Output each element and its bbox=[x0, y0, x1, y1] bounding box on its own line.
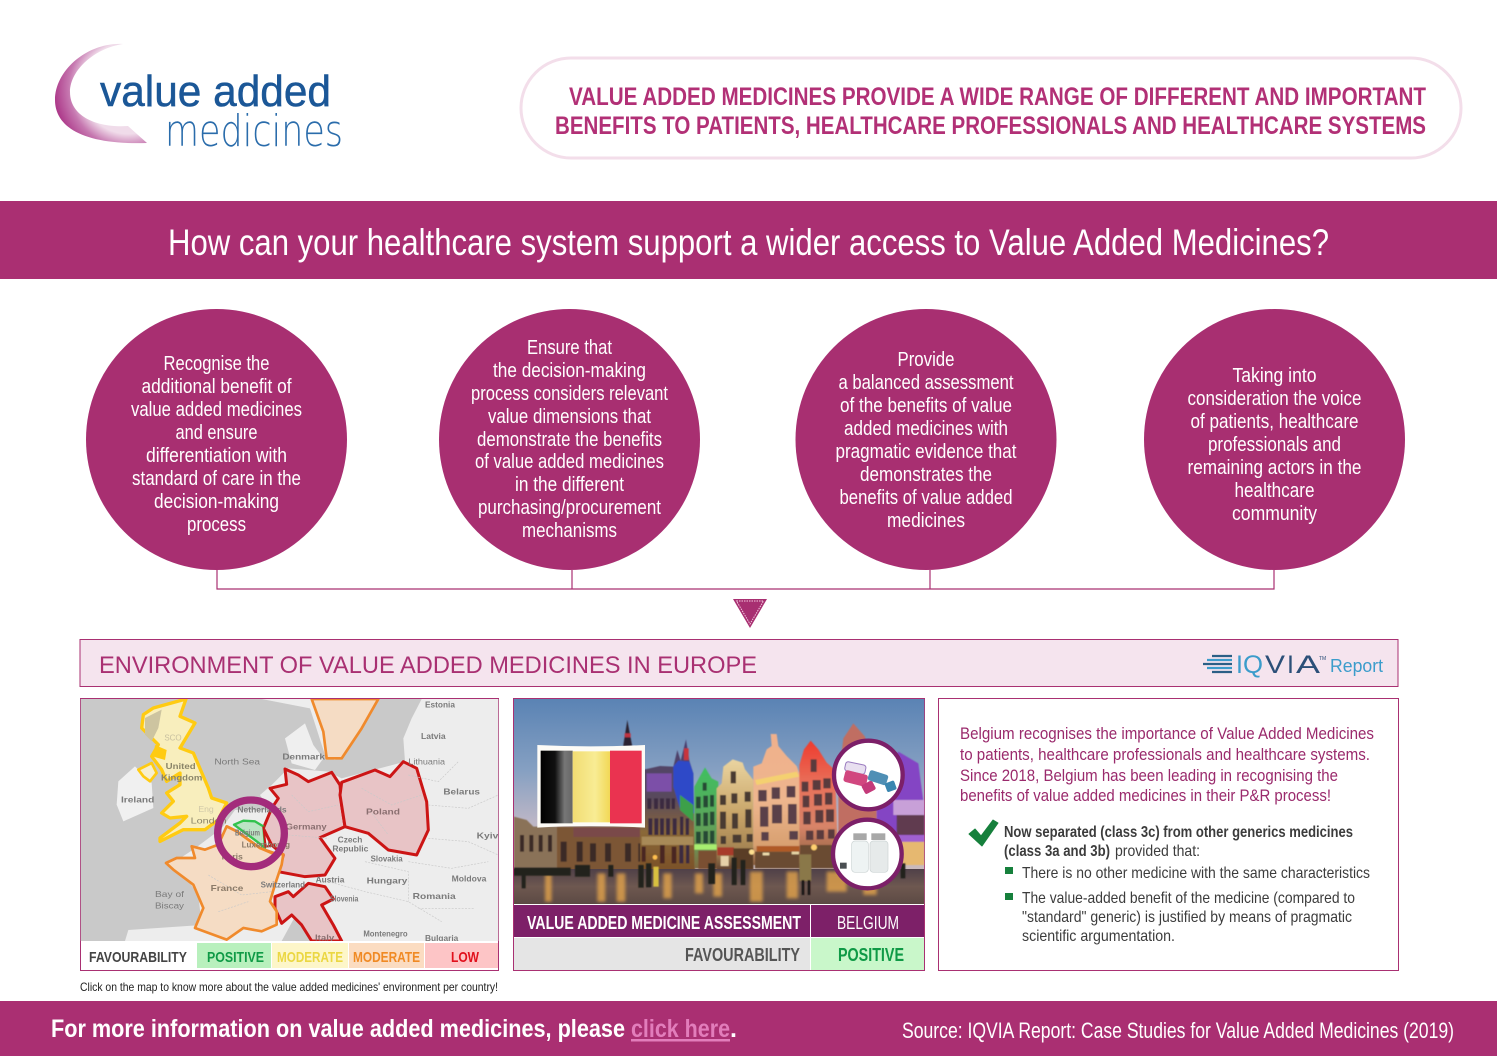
map labels: Slovakia bbox=[371, 853, 403, 863]
footer band bbox=[0, 1001, 1497, 1056]
criteria list: (class 3a and 3b) bbox=[1004, 843, 1110, 860]
map labels: Paris bbox=[222, 851, 243, 861]
circle 2: value dimensions: process considers relevant bbox=[471, 383, 668, 405]
map caption: Click on the map to know more about the value added medicines' environment per country! bbox=[80, 980, 498, 994]
positive: Belgium bbox=[234, 821, 265, 848]
circle 1: recognise benefit: Recognise the bbox=[164, 353, 270, 375]
map labels: Netherlands bbox=[237, 804, 287, 814]
low: Germany bbox=[263, 769, 345, 877]
circle 4: voice of stakeholders: professionals and bbox=[1208, 434, 1341, 456]
map labels: Austria bbox=[316, 874, 345, 884]
legend: favourability bbox=[89, 943, 498, 968]
map labels: Italy bbox=[315, 932, 335, 942]
map labels: Luxembourg bbox=[242, 840, 290, 850]
circle 1: recognise benefit: and ensure bbox=[176, 422, 258, 444]
circle 2: value dimensions: in the different bbox=[515, 474, 624, 496]
circle 3: balanced assessment: added medicines with bbox=[844, 418, 1008, 440]
map labels: Poland bbox=[366, 806, 400, 816]
circle 2: value dimensions: value dimensions that bbox=[488, 406, 651, 428]
IQVIA report logo: V bbox=[1265, 651, 1285, 679]
map of Europe with favourability outlines bbox=[81, 699, 499, 943]
circle 1: recognise benefit: value added medicines bbox=[131, 399, 302, 421]
circle 2: value dimensions: the decision-making bbox=[493, 360, 646, 382]
panel: Belgium text bbox=[938, 698, 1398, 970]
map labels: Bay of bbox=[155, 889, 185, 899]
logo: value added medicines bbox=[55, 44, 343, 157]
map labels: Kyiv bbox=[477, 830, 499, 840]
criteria list: The value-added benefit of the medicine (compared to bbox=[1022, 890, 1355, 907]
IQVIA report logo: A bbox=[1296, 651, 1320, 679]
Scottish highlands bbox=[145, 710, 162, 741]
criteria list: "standard" generic) is justified by means of pragmatic bbox=[1022, 909, 1352, 926]
circle 3: balanced assessment: pragmatic evidence that bbox=[836, 441, 1017, 463]
intro paragraph: Since 2018, Belgium has been leading in recognising the bbox=[960, 766, 1338, 785]
panel: Europe map bbox=[80, 698, 499, 970]
map labels: North Sea bbox=[214, 756, 260, 766]
map labels: Germany bbox=[286, 821, 327, 831]
map labels: Kingdom bbox=[161, 773, 203, 783]
map labels: Czech bbox=[338, 834, 362, 844]
circle 4: voice of stakeholders: remaining actors in the bbox=[1188, 457, 1362, 479]
circle 4: voice of stakeholders: healthcare bbox=[1234, 480, 1314, 502]
IQVIA report logo: I bbox=[1236, 651, 1243, 679]
circle 3: balanced assessment bbox=[796, 309, 1056, 570]
map labels: Moldova bbox=[452, 873, 487, 883]
legend: favourability: MODERATE bbox=[353, 949, 420, 966]
map labels: Romania bbox=[413, 891, 456, 901]
criteria list bbox=[1004, 824, 1370, 945]
circle 3: balanced assessment: of the benefits of value bbox=[840, 395, 1012, 417]
circle 4: voice of stakeholders: community bbox=[1232, 503, 1317, 525]
green house bbox=[694, 767, 718, 868]
circle 3: balanced assessment: benefits of value added bbox=[840, 487, 1012, 509]
section header: environment in Europe: ENVIRONMENT OF VALUE ADDED MEDICINES IN EUROPE bbox=[99, 652, 757, 679]
map labels: Estonia bbox=[425, 700, 455, 710]
left low buildings under flag bbox=[514, 720, 647, 872]
headline pill bbox=[521, 58, 1461, 158]
icon: inhalers bbox=[834, 741, 903, 809]
table: assessment: FAVOURABILITY bbox=[685, 945, 800, 965]
pink and purple houses bbox=[838, 723, 924, 865]
IQVIA report logo: TM bbox=[1319, 656, 1326, 662]
criteria list: Now separated (class 3c) from other generics medicines bbox=[1004, 824, 1353, 841]
internal borders bbox=[208, 762, 498, 922]
icon: green check bbox=[969, 820, 998, 846]
panel: Belgium photo and assessment bbox=[514, 698, 924, 970]
map labels: Latvia bbox=[421, 731, 446, 741]
map labels: SCO bbox=[164, 733, 182, 743]
circle 1: recognise benefit: process bbox=[187, 514, 246, 536]
map labels: Ireland bbox=[121, 795, 154, 805]
cream gold house bbox=[717, 759, 753, 870]
circle 2: value dimensions: mechanisms bbox=[522, 520, 617, 542]
map labels: Lithuania bbox=[408, 756, 445, 766]
moderate: France bbox=[166, 826, 283, 940]
circle 1: recognise benefit: standard of care in the bbox=[132, 468, 301, 490]
circle 4: voice of stakeholders: of patients, healthcare bbox=[1190, 411, 1358, 433]
flag of Belgium bbox=[537, 745, 645, 828]
people bbox=[514, 854, 905, 895]
circle 4: voice of stakeholders bbox=[1144, 309, 1405, 570]
circle 1: recognise benefit: decision-making bbox=[154, 491, 279, 513]
circle 2: value dimensions: purchasing/procurement bbox=[478, 497, 661, 519]
connector lines bbox=[217, 570, 1274, 589]
IQVIA report logo: Report bbox=[1330, 656, 1383, 676]
footer band: . bbox=[730, 1015, 737, 1043]
red house bbox=[799, 741, 838, 863]
circle 1: recognise benefit: additional benefit of bbox=[142, 376, 292, 398]
table: assessment bbox=[514, 905, 924, 970]
circle 2: value dimensions bbox=[439, 309, 700, 570]
map labels: Hungary bbox=[367, 876, 408, 886]
logo: value added medicines: value added bbox=[100, 67, 331, 116]
map labels: Biscay bbox=[155, 900, 185, 910]
criteria list: provided that: bbox=[1115, 843, 1200, 860]
map labels: United bbox=[166, 761, 196, 771]
title band bbox=[0, 201, 1497, 279]
criteria list: scientific argumentation. bbox=[1022, 928, 1175, 945]
circle 4: voice of stakeholders: Taking into bbox=[1232, 365, 1316, 387]
map labels: France bbox=[211, 883, 244, 893]
section header: environment in Europe bbox=[80, 640, 1398, 686]
circle 3: balanced assessment: Provide bbox=[898, 349, 954, 371]
legend: favourability: FAVOURABILITY bbox=[89, 949, 187, 966]
map labels: London bbox=[191, 815, 227, 825]
circle 1: recognise benefit bbox=[86, 309, 347, 570]
table: assessment: BELGIUM bbox=[837, 913, 899, 933]
circle 3: balanced assessment: a balanced assessment bbox=[838, 372, 1014, 394]
icon: vials bbox=[833, 820, 902, 888]
map labels: Denmark bbox=[282, 751, 325, 761]
legend: favourability: POSITIVE bbox=[207, 949, 264, 966]
footer band: For more information on value added medicines, please bbox=[51, 1015, 625, 1043]
moderate-yellow: United Kingdom bbox=[142, 699, 227, 841]
circle 2: value dimensions: demonstrate the benefits bbox=[477, 429, 662, 451]
reflections bbox=[545, 872, 877, 902]
photo: Grand Place Brussels bbox=[514, 699, 924, 904]
circle 3: balanced assessment: medicines bbox=[887, 510, 965, 532]
square ground bbox=[514, 869, 924, 904]
moderate-yellow: Ireland north bbox=[138, 763, 157, 781]
intro paragraph: to patients, healthcare professionals and healthcare systems. bbox=[960, 745, 1370, 764]
circle 2: value dimensions: of value added medicines bbox=[475, 451, 664, 473]
map labels: Switzerland bbox=[261, 880, 305, 890]
peach house bbox=[753, 734, 800, 865]
map labels: Eng bbox=[198, 804, 214, 814]
IQVIA report logo: Q bbox=[1243, 651, 1263, 679]
intro paragraph bbox=[960, 724, 1374, 805]
intro paragraph: Belgium recognises the importance of Value Added Medicines bbox=[960, 724, 1374, 743]
footer band: click here bbox=[631, 1015, 730, 1043]
legend: favourability: MODERATE bbox=[277, 949, 343, 966]
circle 1: recognise benefit: differentiation with bbox=[146, 445, 287, 467]
table: assessment: POSITIVE bbox=[838, 945, 904, 965]
intro paragraph: benefits of value added medicines in their P&R process! bbox=[960, 786, 1331, 805]
map labels bbox=[121, 700, 499, 943]
IQVIA report logo bbox=[1203, 651, 1383, 679]
buildings, drawn at 3x offset coordinates bbox=[640, 734, 838, 872]
map labels: Slovenia bbox=[330, 893, 358, 903]
criteria list: There is no other medicine with the same characteristics bbox=[1022, 865, 1370, 882]
legend: favourability: LOW bbox=[451, 949, 480, 966]
circle 2: value dimensions: Ensure that bbox=[527, 337, 612, 359]
map labels: Montenegro bbox=[363, 928, 408, 938]
IQVIA report logo: I bbox=[1287, 651, 1294, 679]
low: Poland bbox=[340, 762, 428, 855]
moderate: Sweden bbox=[312, 699, 378, 758]
lights bbox=[749, 849, 754, 855]
low: Italy bbox=[275, 883, 342, 941]
map labels: Belgium bbox=[235, 828, 260, 838]
map labels: Belarus bbox=[443, 786, 480, 796]
town hall bbox=[640, 739, 695, 872]
circle 3: balanced assessment: demonstrates the bbox=[860, 464, 992, 486]
land base bbox=[125, 699, 498, 941]
logo: value added medicines: medicines bbox=[165, 106, 343, 157]
map labels: Republic bbox=[332, 844, 369, 854]
table: assessment: VALUE ADDED MEDICINE ASSESSMENT bbox=[527, 913, 801, 933]
map labels: Bulgaria bbox=[425, 933, 459, 943]
circle 4: voice of stakeholders: consideration the voice bbox=[1188, 388, 1362, 410]
arrow: down triangle bbox=[733, 599, 767, 628]
highlight ring on Belgium bbox=[218, 800, 284, 867]
